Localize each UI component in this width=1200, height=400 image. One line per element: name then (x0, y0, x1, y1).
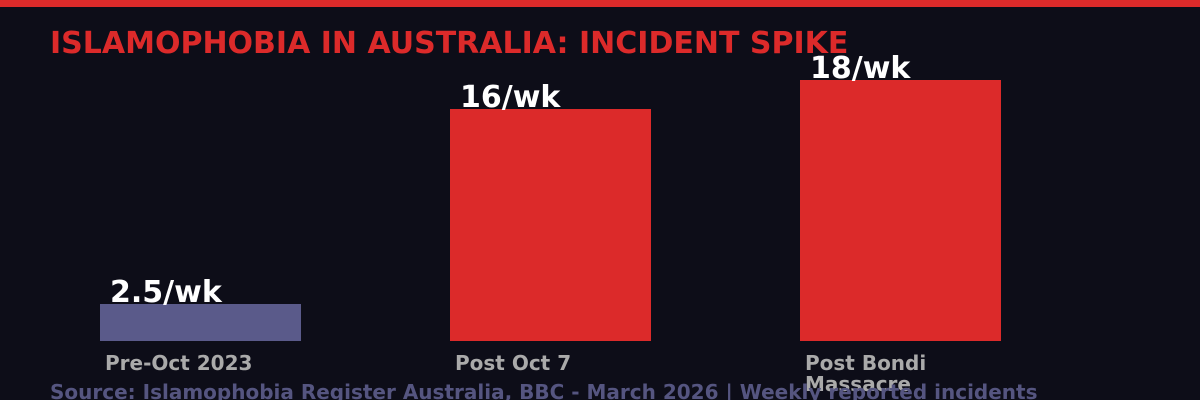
bar: Pre-Oct 2023 (100, 275, 301, 375)
bar: Pre-Oct 2023: Pre-Oct 2023 (105, 351, 252, 375)
bar: Post Oct 7: 16/wk (460, 80, 561, 115)
bar: Post Bondi Massacre: Massacre (805, 372, 911, 396)
bar: Post Oct 7: Post Oct 7 (455, 351, 571, 375)
bar: Post Bondi Massacre: Post Bondi (805, 351, 926, 375)
title: ISLAMOPHOBIA IN AUSTRALIA: INCIDENT SPIKE (50, 26, 848, 61)
bar: Post Bondi Massacre (800, 51, 1001, 396)
bar chart (100, 51, 1001, 396)
bar: Post Oct 7 (450, 80, 651, 375)
bar: Pre-Oct 2023: 2.5/wk (110, 275, 223, 310)
bar: Post Bondi Massacre: 18/wk (810, 51, 911, 86)
